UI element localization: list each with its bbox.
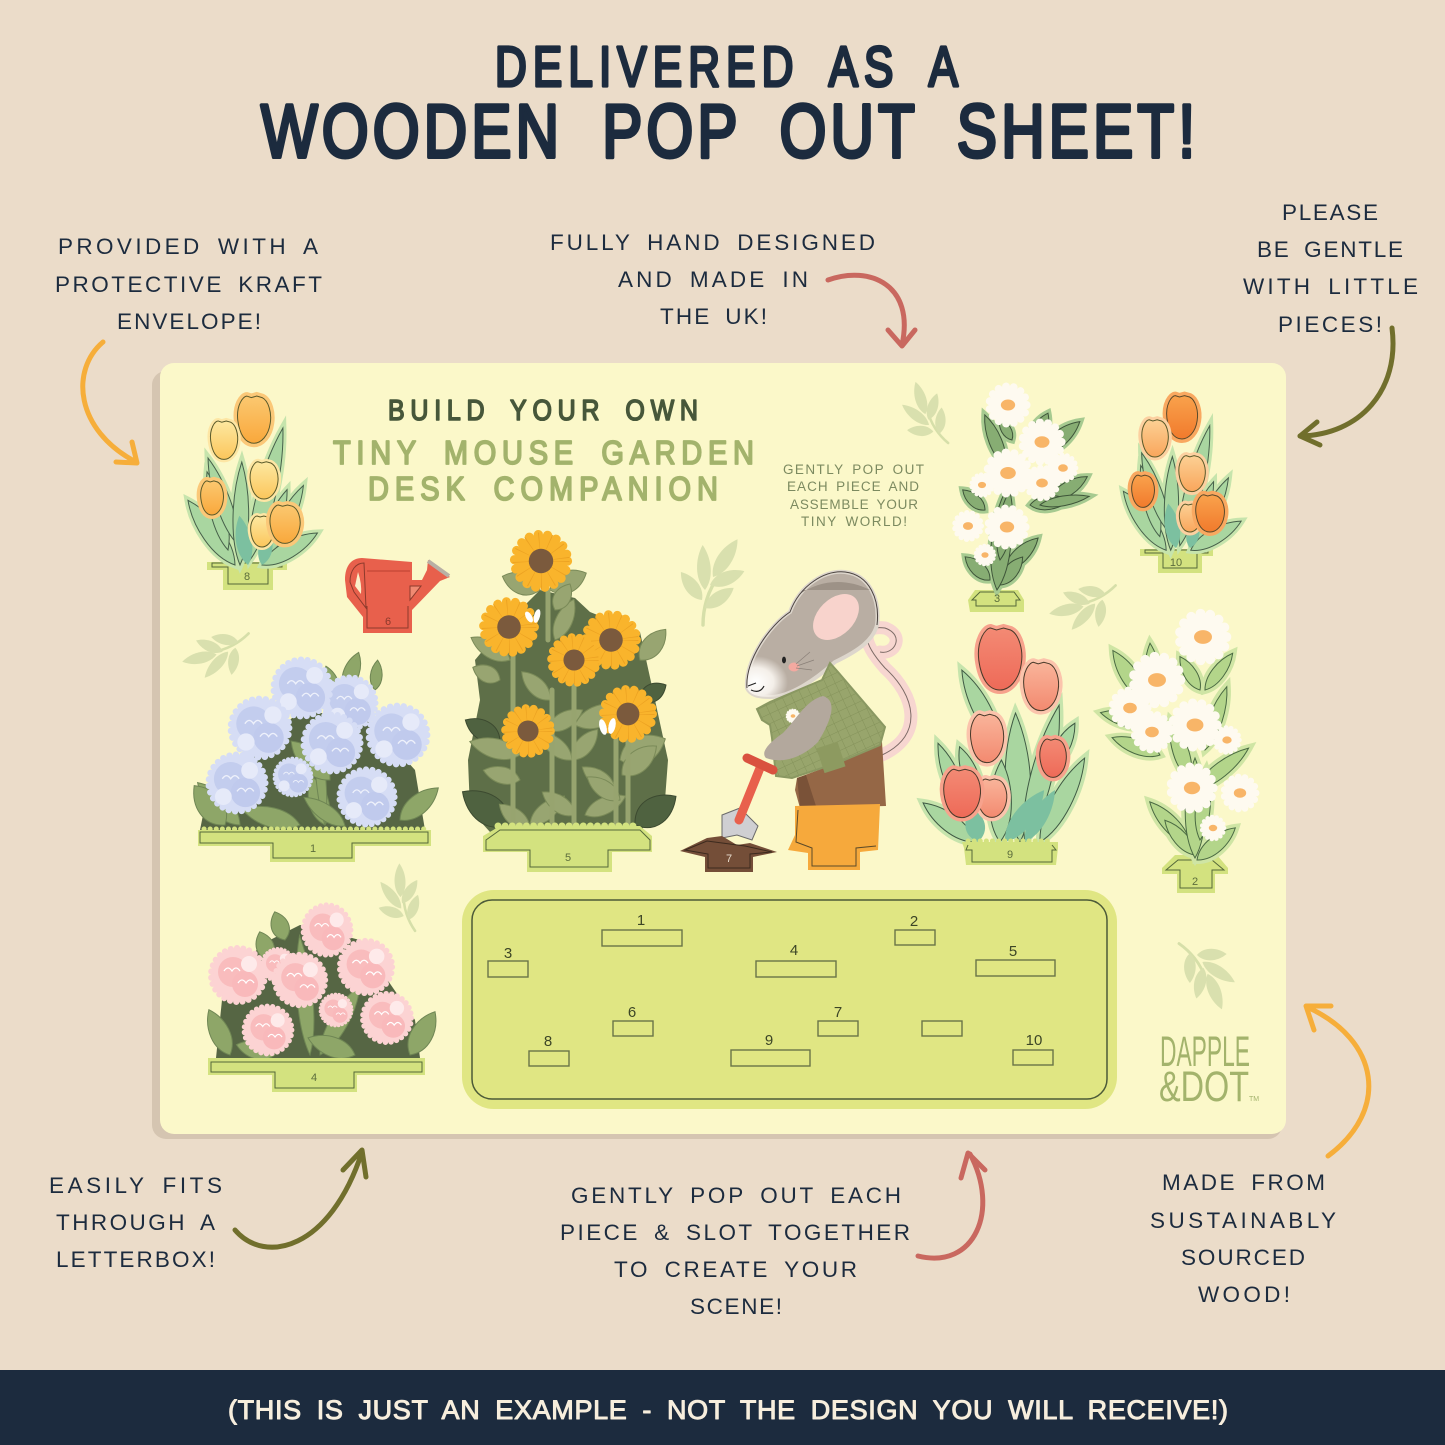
piece 7: mouse gardener: 7	[726, 853, 732, 865]
piece 1: blue hydrangeas: 1	[310, 843, 316, 855]
arrow: be gentle	[1300, 328, 1393, 445]
slot 5: 5	[1009, 943, 1017, 960]
slot 6	[613, 1004, 653, 1036]
head	[747, 572, 878, 697]
logo: Dapple and Dot: DAPPLE	[1160, 1028, 1250, 1076]
instructions text: ASSEMBLE YOUR	[790, 497, 918, 512]
piece 1: blue hydrangeas	[184, 650, 445, 862]
slot unnumbered	[922, 1021, 962, 1036]
sheet surface	[160, 363, 1286, 1134]
piece 4: pink peonies	[200, 905, 444, 1092]
callout: pop out and slot	[560, 1183, 910, 1319]
slot 9	[731, 1032, 810, 1066]
piece 3: white daisies	[955, 386, 1091, 612]
callout: letterbox: EASILY FITS	[49, 1173, 222, 1198]
callout: be gentle: BE GENTLE	[1257, 237, 1403, 262]
callout: be gentle: PIECES!	[1278, 312, 1382, 337]
callout: pop out and slot: PIECE & SLOT TOGETHER	[560, 1220, 910, 1245]
slot 8	[529, 1033, 569, 1066]
callout: hand designed: FULLY HAND DESIGNED	[550, 230, 875, 255]
butterflies	[523, 608, 617, 736]
flower brooch	[787, 710, 799, 722]
logo: Dapple and Dot	[1159, 1028, 1259, 1111]
callout: kraft envelope	[55, 234, 322, 334]
slot 7	[818, 1004, 858, 1036]
piece 5: sunflowers	[454, 534, 684, 872]
piece 8: yellow tulips	[180, 396, 322, 590]
piece 8: yellow tulips: 8	[244, 571, 250, 583]
decorative sprigs	[175, 375, 1255, 1018]
piece 9: coral tulips: 9	[1007, 849, 1013, 861]
callout: letterbox: LETTERBOX!	[56, 1247, 215, 1272]
title	[261, 35, 1195, 174]
panel: wooden sheet	[152, 363, 1286, 1139]
slot 5	[976, 943, 1055, 976]
arrow: slot together	[918, 1153, 985, 1258]
arrow: sustainable wood	[1306, 1006, 1369, 1156]
callout: pop out and slot: SCENE!	[690, 1294, 782, 1319]
callout: kraft envelope: PROVIDED WITH A	[58, 234, 318, 259]
callout: letterbox: THROUGH A	[56, 1210, 215, 1235]
piece 3: white daisies: 3	[994, 593, 1000, 605]
slot 3: 3	[504, 945, 512, 962]
slot 2	[895, 913, 935, 945]
piece 6: watering can	[345, 558, 450, 633]
jacket	[757, 663, 885, 778]
slot 10: 10	[1026, 1032, 1042, 1049]
callout: hand designed: AND MADE IN	[618, 267, 808, 292]
callout: sustainable wood: WOOD!	[1198, 1282, 1290, 1307]
instructions text: EACH PIECE AND	[787, 479, 919, 494]
garden base with slots	[462, 890, 1117, 1109]
piece 6: watering can: 6	[385, 616, 391, 628]
arm	[764, 696, 832, 760]
sheet heading	[333, 394, 754, 507]
slot 8: 8	[544, 1033, 552, 1050]
piece 4: pink peonies: 4	[311, 1072, 317, 1084]
tail	[867, 628, 911, 755]
callout: hand designed: THE UK!	[660, 304, 767, 329]
trousers	[795, 742, 886, 808]
callout: letterbox	[49, 1173, 222, 1272]
boots	[788, 804, 880, 870]
logo: Dapple and Dot: &DOT	[1159, 1063, 1249, 1111]
instructions text: GENTLY POP OUT	[783, 462, 924, 477]
footer banner	[0, 1370, 1445, 1445]
slot 1	[602, 912, 682, 946]
callout: be gentle: WITH LITTLE	[1243, 274, 1418, 299]
piece 10: orange tulips	[1116, 396, 1245, 573]
instructions text: TINY WORLD!	[801, 514, 907, 529]
callout: kraft envelope: ENVELOPE!	[117, 309, 261, 334]
callout: sustainable wood: SOURCED	[1181, 1245, 1305, 1270]
callout: kraft envelope: PROTECTIVE KRAFT	[55, 272, 322, 297]
slot 9: 9	[765, 1032, 773, 1049]
slot 6: 6	[628, 1004, 636, 1021]
sheet heading: BUILD YOUR OWN	[388, 394, 698, 426]
piece 5: sunflowers: 5	[565, 852, 571, 864]
slot 1: 1	[637, 912, 645, 929]
piece 2: cream daisies: 2	[1192, 876, 1198, 888]
instructions text	[783, 462, 924, 529]
callout: pop out and slot: TO CREATE YOUR	[614, 1257, 857, 1282]
callout: pop out and slot: GENTLY POP OUT EACH	[571, 1183, 901, 1208]
slot 7: 7	[834, 1004, 842, 1021]
slot 3	[488, 945, 528, 977]
slot 4	[756, 942, 836, 977]
sheet heading: DESK COMPANION	[368, 470, 718, 507]
sheet shadow	[152, 371, 1282, 1139]
callout: hand designed	[550, 230, 875, 329]
callout: be gentle: PLEASE	[1282, 200, 1378, 225]
arrow: envelope	[83, 342, 137, 463]
footer banner: (THIS IS JUST AN EXAMPLE - NOT THE DESIGN YOU WILL RECEIVE!)	[228, 1395, 1228, 1425]
arrow: letterbox	[235, 1150, 366, 1247]
callout: sustainable wood: MADE FROM	[1162, 1170, 1325, 1195]
slot 2: 2	[910, 913, 918, 930]
logo: Dapple and Dot: TM	[1249, 1096, 1259, 1103]
callout: sustainable wood	[1150, 1170, 1336, 1307]
callout: be gentle	[1243, 200, 1418, 337]
title: WOODEN POP OUT SHEET!	[261, 89, 1195, 174]
callout: sustainable wood: SUSTAINABLY	[1150, 1208, 1336, 1233]
spade	[722, 808, 758, 840]
arrow: hand designed	[828, 275, 915, 346]
slot 4: 4	[790, 942, 798, 959]
soil	[680, 836, 777, 872]
piece 10: orange tulips: 10	[1170, 557, 1182, 569]
piece 9: coral tulips	[918, 628, 1093, 865]
piece 2: cream daisies	[1099, 614, 1256, 893]
title: DELIVERED AS A	[495, 35, 958, 98]
piece 7: mouse gardener	[680, 572, 911, 872]
sheet heading: TINY MOUSE GARDEN	[333, 434, 754, 471]
slot 10	[1013, 1032, 1053, 1065]
